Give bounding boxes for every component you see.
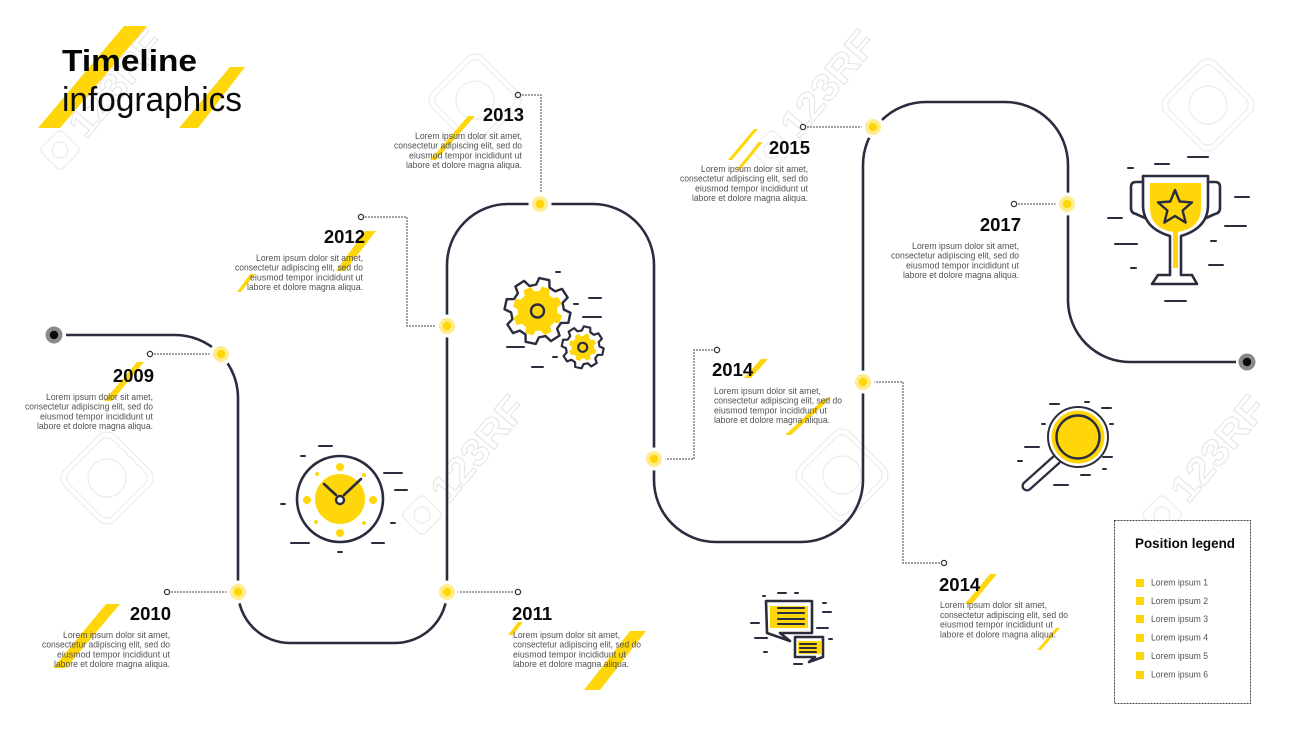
milestone 2015: consectetur adipiscing elit, sed do	[680, 174, 808, 184]
watermark pattern: 123RF	[773, 23, 885, 146]
timeline nodes	[210, 116, 1078, 604]
milestone 2015: Lorem ipsum dolor sit amet,	[701, 164, 808, 174]
milestone 2014 center: Lorem ipsum dolor sit amet,	[714, 386, 821, 396]
milestone 2012: consectetur adipiscing elit, sed do	[235, 262, 363, 272]
milestone 2014 center: 2014	[712, 359, 754, 380]
legend items: Lorem ipsum 3	[1151, 614, 1208, 624]
milestone 2009: Lorem ipsum dolor sit amet,	[46, 392, 153, 402]
icon: speech bubbles	[751, 593, 832, 664]
watermark pattern: 123RF	[423, 388, 535, 511]
end marker	[1238, 354, 1256, 370]
milestone 2013: labore et dolore magna aliqua.	[406, 160, 522, 170]
milestone 2014 lower: Lorem ipsum dolor sit amet,	[940, 600, 1047, 610]
milestone 2009: consectetur adipiscing elit, sed do	[25, 402, 153, 412]
timeline road	[66, 102, 1236, 643]
title: infographics	[62, 81, 242, 119]
milestone 2012: Lorem ipsum dolor sit amet,	[256, 253, 363, 263]
milestone 2013: Lorem ipsum dolor sit amet,	[415, 131, 522, 141]
milestone 2014 lower: labore et dolore magna aliqua.	[940, 630, 1056, 640]
title	[62, 43, 242, 119]
milestone 2011: consectetur adipiscing elit, sed do	[513, 640, 641, 650]
legend heading: Position legend	[1135, 536, 1235, 551]
milestone 2017: Lorem ipsum dolor sit amet,	[912, 241, 1019, 251]
milestone 2014 center: eiusmod tempor incididunt ut	[714, 406, 827, 416]
milestone 2017: eiusmod tempor incididunt ut	[906, 260, 1019, 270]
milestone 2014 lower: 2014	[939, 574, 981, 595]
milestone 2009	[25, 365, 154, 431]
milestone 2014 lower: consectetur adipiscing elit, sed do	[940, 610, 1068, 620]
milestone 2010: Lorem ipsum dolor sit amet,	[63, 630, 170, 640]
watermark pattern: 123RF	[61, 23, 173, 146]
connector lines	[154, 95, 1058, 592]
milestone 2012	[235, 226, 365, 292]
watermark pattern	[39, 23, 1275, 536]
milestone 2013: eiusmod tempor incididunt ut	[409, 150, 522, 160]
milestone 2015: 2015	[769, 137, 810, 158]
milestone 2017	[891, 214, 1021, 280]
legend items: Lorem ipsum 6	[1151, 670, 1208, 680]
milestone 2011	[512, 603, 641, 669]
milestone 2014 center: labore et dolore magna aliqua.	[714, 415, 830, 425]
milestone 2011: eiusmod tempor incididunt ut	[513, 650, 626, 660]
legend items: Lorem ipsum 1	[1151, 578, 1208, 588]
title: Timeline	[62, 43, 197, 78]
milestone 2011: 2011	[512, 603, 552, 624]
milestone 2012: eiusmod tempor incididunt ut	[250, 272, 363, 282]
milestone 2014 center	[712, 359, 842, 425]
legend items	[1136, 578, 1208, 680]
milestone 2010: eiusmod tempor incididunt ut	[57, 650, 170, 660]
icon: magnifying glass	[1018, 402, 1113, 486]
legend items: Lorem ipsum 5	[1151, 651, 1208, 661]
milestone 2010: 2010	[130, 603, 171, 624]
milestone 2014 lower: eiusmod tempor incididunt ut	[940, 620, 1053, 630]
milestone 2013: consectetur adipiscing elit, sed do	[394, 140, 522, 150]
milestone 2012: labore et dolore magna aliqua.	[247, 282, 363, 292]
milestone 2011: labore et dolore magna aliqua.	[513, 659, 629, 669]
milestone 2017: 2017	[980, 214, 1021, 235]
milestone 2015	[680, 137, 810, 203]
milestone 2010: labore et dolore magna aliqua.	[54, 659, 170, 669]
milestone 2009: 2009	[113, 365, 154, 386]
decorative yellow slashes	[38, 26, 1060, 690]
icon: clock	[281, 446, 407, 552]
milestone 2015: eiusmod tempor incididunt ut	[695, 184, 808, 194]
milestone 2011: Lorem ipsum dolor sit amet,	[513, 630, 620, 640]
connector end points	[147, 92, 1017, 595]
milestone 2014 lower	[939, 574, 1068, 640]
legend items: Lorem ipsum 4	[1151, 632, 1208, 642]
milestone 2012: 2012	[324, 226, 365, 247]
icon: trophy	[1108, 157, 1249, 301]
milestone 2013: 2013	[483, 104, 524, 125]
milestone 2017: consectetur adipiscing elit, sed do	[891, 250, 1019, 260]
milestone 2015: labore et dolore magna aliqua.	[692, 193, 808, 203]
milestone 2013	[394, 104, 524, 170]
panel: position legend	[1114, 520, 1250, 704]
milestone 2009: eiusmod tempor incididunt ut	[40, 412, 153, 422]
milestone 2010	[42, 603, 171, 669]
watermark pattern: 123RF	[1163, 388, 1275, 511]
milestone 2014 center: consectetur adipiscing elit, sed do	[714, 396, 842, 406]
legend items: Lorem ipsum 2	[1151, 596, 1208, 606]
milestone 2009: labore et dolore magna aliqua.	[37, 421, 153, 431]
start marker	[46, 326, 62, 344]
milestone 2010: consectetur adipiscing elit, sed do	[42, 640, 170, 650]
milestone 2017: labore et dolore magna aliqua.	[903, 270, 1019, 280]
icon: gears	[499, 272, 607, 372]
